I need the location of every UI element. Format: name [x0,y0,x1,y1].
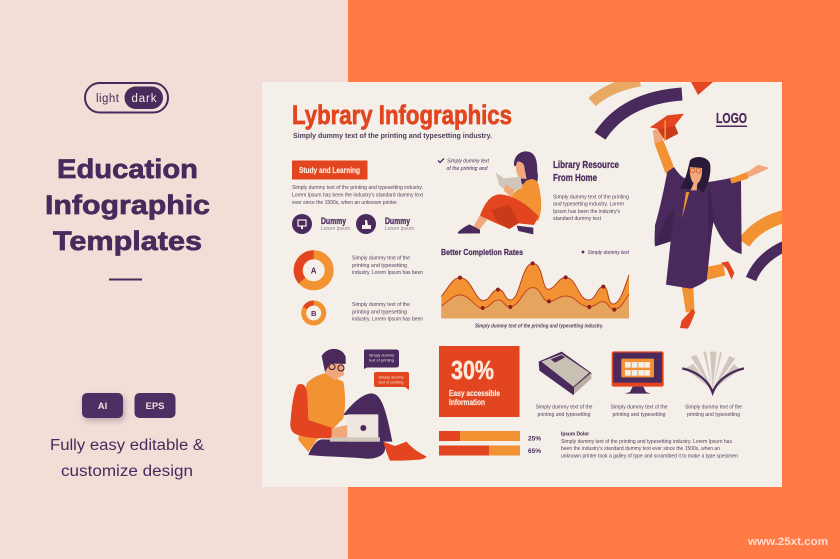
heading: Education Infographic Templates [45,154,210,256]
stat: dummy one: Dummy [321,216,346,226]
text block: A: industry. Lorem Ipsum has been [352,270,423,276]
callout: 30%: Information [449,398,485,407]
speech bubble: red: Simply dummy [378,374,404,380]
area chart [441,261,629,318]
text block: library: Simply dummy text of the printing [553,194,629,200]
heading: Library Resource [553,159,619,184]
legend: Simply dummy text [588,250,630,256]
speech bubble: dark: Simply dummy [369,352,394,358]
speech bubble: red [374,372,409,390]
panel: infographic sheet [262,82,782,487]
badge: AI: AI [98,401,107,412]
speech bubble: red: text of printing [378,380,404,384]
text block: Ipsum Dolor [561,432,738,460]
watermark: www.25xt.com [747,536,828,548]
donut chart A: A [311,266,317,276]
text block: library: and typesetting industry. Lorem [553,202,624,208]
captions: icons: Simply dummy text of the [536,404,593,410]
text: editable note [50,437,205,480]
illustration: graduate [650,114,769,329]
icon: open book [682,352,744,393]
callout: 30% [439,346,520,417]
progress bar: 25% [439,431,541,442]
captions: icons: printing and typesetting [538,412,591,418]
text block: study [292,185,424,206]
text block: A: printing and typesetting [352,263,407,269]
speech bubble: dark: text of printing [369,358,394,362]
heading: Education Infographic Templates: Templates [53,226,202,256]
text block: study: Simply dummy text of the printing and typesetting industry. [292,185,423,191]
captions: icons: Simply dummy text of the [610,404,668,410]
heading: Education Infographic Templates: Infographic [45,190,210,220]
text block: A [352,256,423,276]
text block: study: ever since the 1500s, when an unknown printer [292,200,397,206]
text: editable note: Fully easy editable & [50,437,205,454]
text: editable note: customize design [61,463,193,480]
heading: Better Completion Rates: Better Completion Rates [441,247,523,257]
text block: Ipsum Dolor: unknown printer took a galley of type and scrambled it to make a type specimen [561,454,738,460]
note: check: Simply dummy text [447,158,490,164]
donut chart B [304,303,324,323]
captions: icons: Simply dummy text of the [685,404,742,410]
toggle: light and dark: dark [132,93,157,105]
section label: Study and Learning: Study and Learning [299,165,360,175]
text block: library [553,194,629,222]
progress bar: 65%: 65% [528,448,541,455]
text block: A: Simply dummy text of the [352,256,410,262]
captions: icons [536,404,742,418]
note: check: of the printing and [446,166,488,172]
stat: dummy one [292,214,350,234]
callout: 30%: 30% [451,355,494,385]
heading: Library Resource: From Home [553,172,597,184]
callout: 30%: Easy accessible [449,389,500,398]
toggle: light and dark [85,83,168,112]
donut chart A [298,255,329,286]
speech bubble: dark [364,350,399,369]
illustration: man with laptop [290,349,427,461]
note: check [438,158,490,172]
chart caption: Simply dummy text of the printing and typesetting industry. [475,324,604,330]
logo: LOGO [716,110,747,127]
icon: monitor [612,351,664,394]
title: Lybrary Infographics [292,100,512,130]
stat: dummy two [356,214,414,234]
stat: dummy two: Dummy [385,216,410,226]
donut chart B: B [311,309,317,318]
text block: library: Ipsum has been the industry's [553,209,620,215]
progress bar: 65% [439,446,541,456]
text block: library: standard dummy text [553,216,602,222]
heading: Library Resource: Library Resource [553,159,619,171]
captions: icons: printing and typesetting [612,412,666,418]
heading: Education Infographic Templates: Education [57,154,198,184]
text block: B [352,302,423,322]
captions: icons: printing and typesetting [687,412,740,418]
text block: Ipsum Dolor: Simply dummy text of the printing and typesetting industry. Lorem Ipsum has [561,439,732,445]
text block: B: printing and typesetting [352,310,407,316]
toggle: light and dark: light [96,93,120,105]
text block: Ipsum Dolor: been the industry's standard dummy text ever since the 1500s, when an [561,446,720,452]
badge: EPS [134,393,176,418]
illustration: woman reading [458,151,541,234]
stat: dummy two: Lorem Ipsum [385,226,414,232]
decorative arcs [592,81,790,279]
badge: AI [82,393,123,418]
progress bar: 25%: 25% [528,436,541,442]
subtitle: Simply dummy text of the printing and typesetting industry. [293,131,492,140]
text block: B: industry. Lorem Ipsum has been [352,316,423,322]
text block: B: Simply dummy text of the [352,302,410,308]
badge: EPS: EPS [145,401,165,412]
text block: study: Lorem Ipsum has been the industry's standard dummy text [292,192,424,198]
stat: dummy one: Lorem Ipsum [321,226,350,232]
section label: Study and Learning [292,160,368,180]
icon: closed book [539,352,592,395]
text block: Ipsum Dolor: Ipsum Dolor [561,432,589,438]
